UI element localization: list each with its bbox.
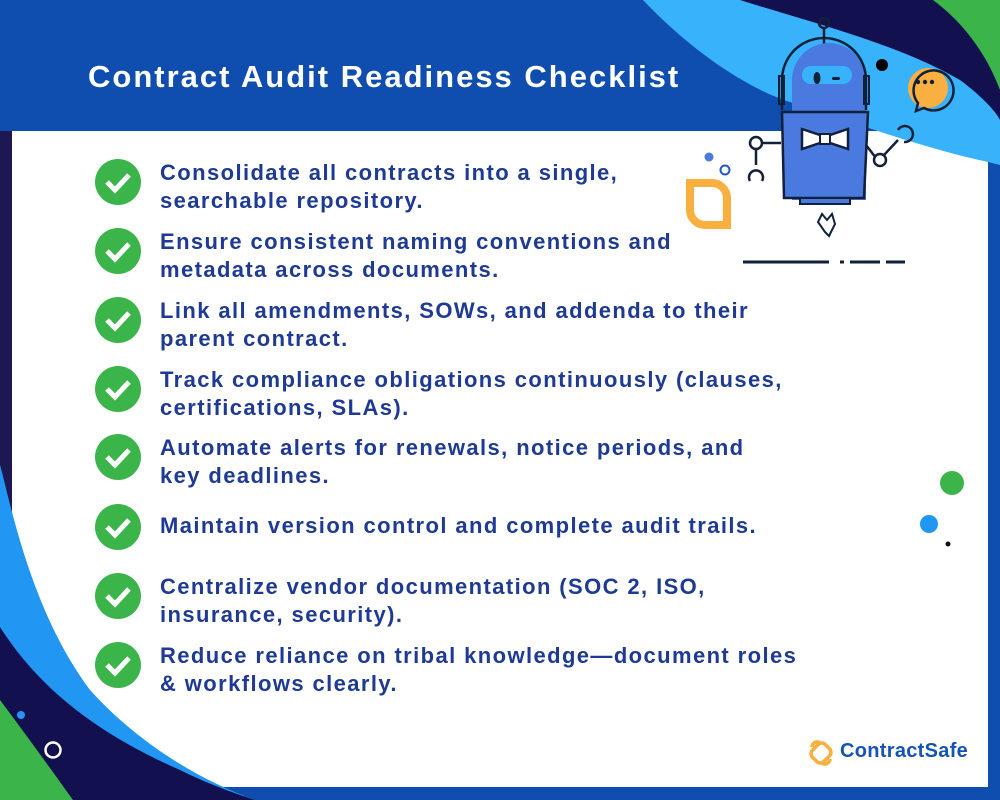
checklist item 4: Track compliance obligations continuously (clauses, — [160, 367, 783, 392]
checklist item 7 — [95, 573, 706, 627]
checklist item 3 — [95, 297, 749, 351]
checklist item 1: Consolidate all contracts into a single, — [160, 160, 618, 185]
checklist item 8: Reduce reliance on tribal knowledge—document roles — [160, 643, 797, 668]
checklist item 3: parent contract. — [160, 326, 349, 351]
checklist item 1: searchable repository. — [160, 188, 424, 213]
checklist item 7: Centralize vendor documentation (SOC 2, ISO, — [160, 574, 706, 599]
checklist item 4 — [95, 366, 783, 420]
checklist item 1 — [95, 159, 618, 213]
title: Contract Audit Readiness Checklist — [88, 59, 680, 94]
checklist item 8: & workflows clearly. — [160, 671, 398, 696]
checklist item 2 — [95, 228, 672, 282]
checklist item 6 — [95, 504, 757, 550]
logo: ContractSafe: ContractSafe — [840, 740, 968, 762]
checklist item 3: Link all amendments, SOWs, and addenda to their — [160, 298, 749, 323]
checklist item 4: certifications, SLAs). — [160, 395, 410, 420]
checklist item 2: Ensure consistent naming conventions and — [160, 229, 672, 254]
logo: ContractSafe — [809, 740, 968, 766]
checklist item 5: key deadlines. — [160, 463, 330, 488]
checklist item 5 — [95, 434, 745, 488]
checklist item 6: Maintain version control and complete audit trails. — [160, 513, 757, 538]
checklist item 8 — [95, 642, 797, 696]
checklist item 7: insurance, security). — [160, 602, 403, 627]
checklist item 2: metadata across documents. — [160, 257, 500, 282]
checklist item 5: Automate alerts for renewals, notice periods, and — [160, 435, 745, 460]
